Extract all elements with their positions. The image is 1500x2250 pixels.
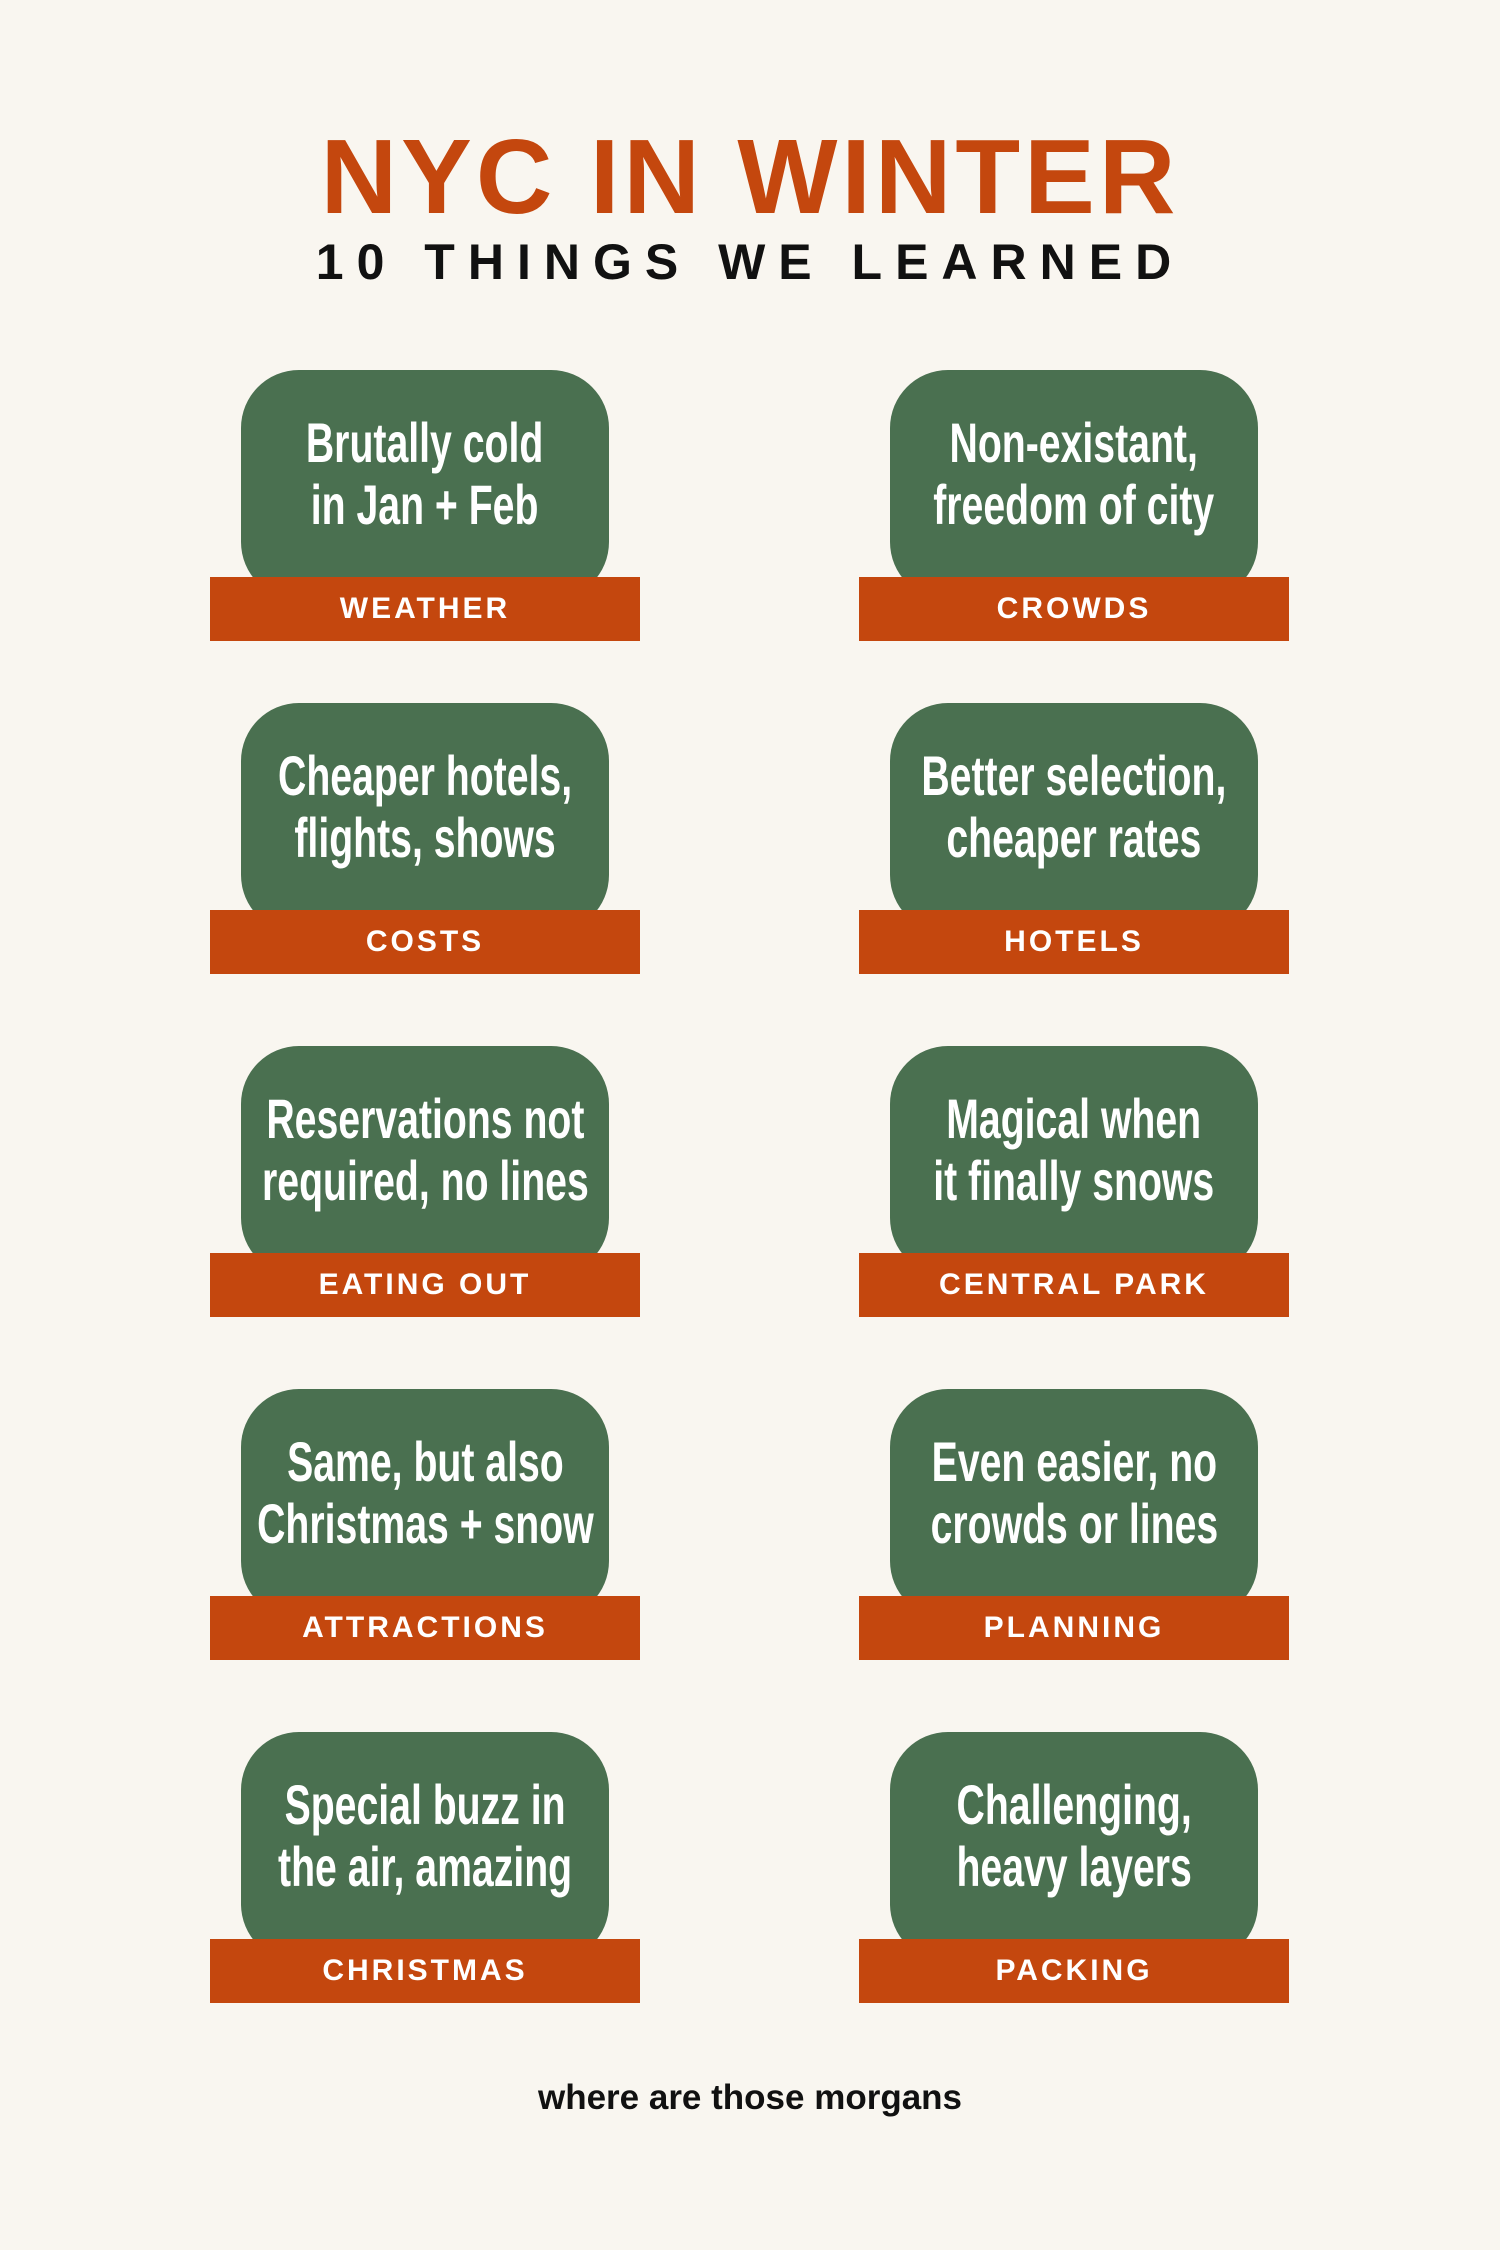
subtitle: 10 THINGS WE LEARNED bbox=[316, 234, 1184, 290]
card: crowds bbox=[859, 370, 1289, 641]
card: planning: PLANNING bbox=[984, 1611, 1164, 1644]
card: attractions: ATTRACTIONS bbox=[302, 1611, 548, 1644]
card: christmas: Special buzz in bbox=[284, 1772, 565, 1836]
card: crowds: Non-existant, bbox=[950, 410, 1198, 474]
card: central park: CENTRAL PARK bbox=[939, 1268, 1209, 1301]
card: eating out: required, no lines bbox=[262, 1148, 588, 1212]
card: attractions: Christmas + snow bbox=[257, 1492, 593, 1554]
card: christmas: CHRISTMAS bbox=[322, 1954, 528, 1987]
card: planning: crowds or lines bbox=[930, 1492, 1218, 1554]
footer: where are those morgans bbox=[538, 2078, 962, 2117]
card: crowds: CROWDS bbox=[997, 592, 1151, 625]
card: eating out bbox=[210, 1046, 640, 1317]
card: packing: heavy layers bbox=[956, 1834, 1192, 1898]
card: costs: Cheaper hotels, bbox=[278, 744, 572, 806]
card: attractions: Same, but also bbox=[287, 1430, 563, 1492]
title: NYC IN WINTER bbox=[321, 118, 1179, 236]
card: planning: Even easier, no bbox=[931, 1430, 1217, 1492]
card: hotels bbox=[859, 703, 1289, 974]
card: central park: Magical when bbox=[947, 1086, 1201, 1150]
card: planning bbox=[859, 1389, 1289, 1660]
card: weather: in Jan + Feb bbox=[311, 472, 539, 536]
card: packing: Challenging, bbox=[956, 1772, 1192, 1836]
card: costs bbox=[210, 703, 640, 974]
card: weather: WEATHER bbox=[340, 592, 510, 625]
card: hotels: HOTELS bbox=[1004, 925, 1144, 958]
card: christmas bbox=[210, 1732, 640, 2003]
card: hotels: cheaper rates bbox=[947, 806, 1201, 868]
card: central park: it finally snows bbox=[934, 1148, 1214, 1212]
card: central park bbox=[859, 1046, 1289, 1317]
card: eating out: EATING OUT bbox=[319, 1268, 531, 1301]
card: hotels: Better selection, bbox=[921, 744, 1226, 806]
card: packing bbox=[859, 1732, 1289, 2003]
card: attractions bbox=[210, 1389, 640, 1660]
card: costs: COSTS bbox=[366, 925, 484, 958]
card: packing: PACKING bbox=[995, 1954, 1153, 1987]
card: weather: Brutally cold bbox=[306, 410, 544, 474]
card: christmas: the air, amazing bbox=[278, 1834, 572, 1898]
card: weather bbox=[210, 370, 640, 641]
card: eating out: Reservations not bbox=[266, 1086, 584, 1150]
card: crowds: freedom of city bbox=[934, 472, 1214, 536]
card: costs: flights, shows bbox=[294, 806, 556, 868]
